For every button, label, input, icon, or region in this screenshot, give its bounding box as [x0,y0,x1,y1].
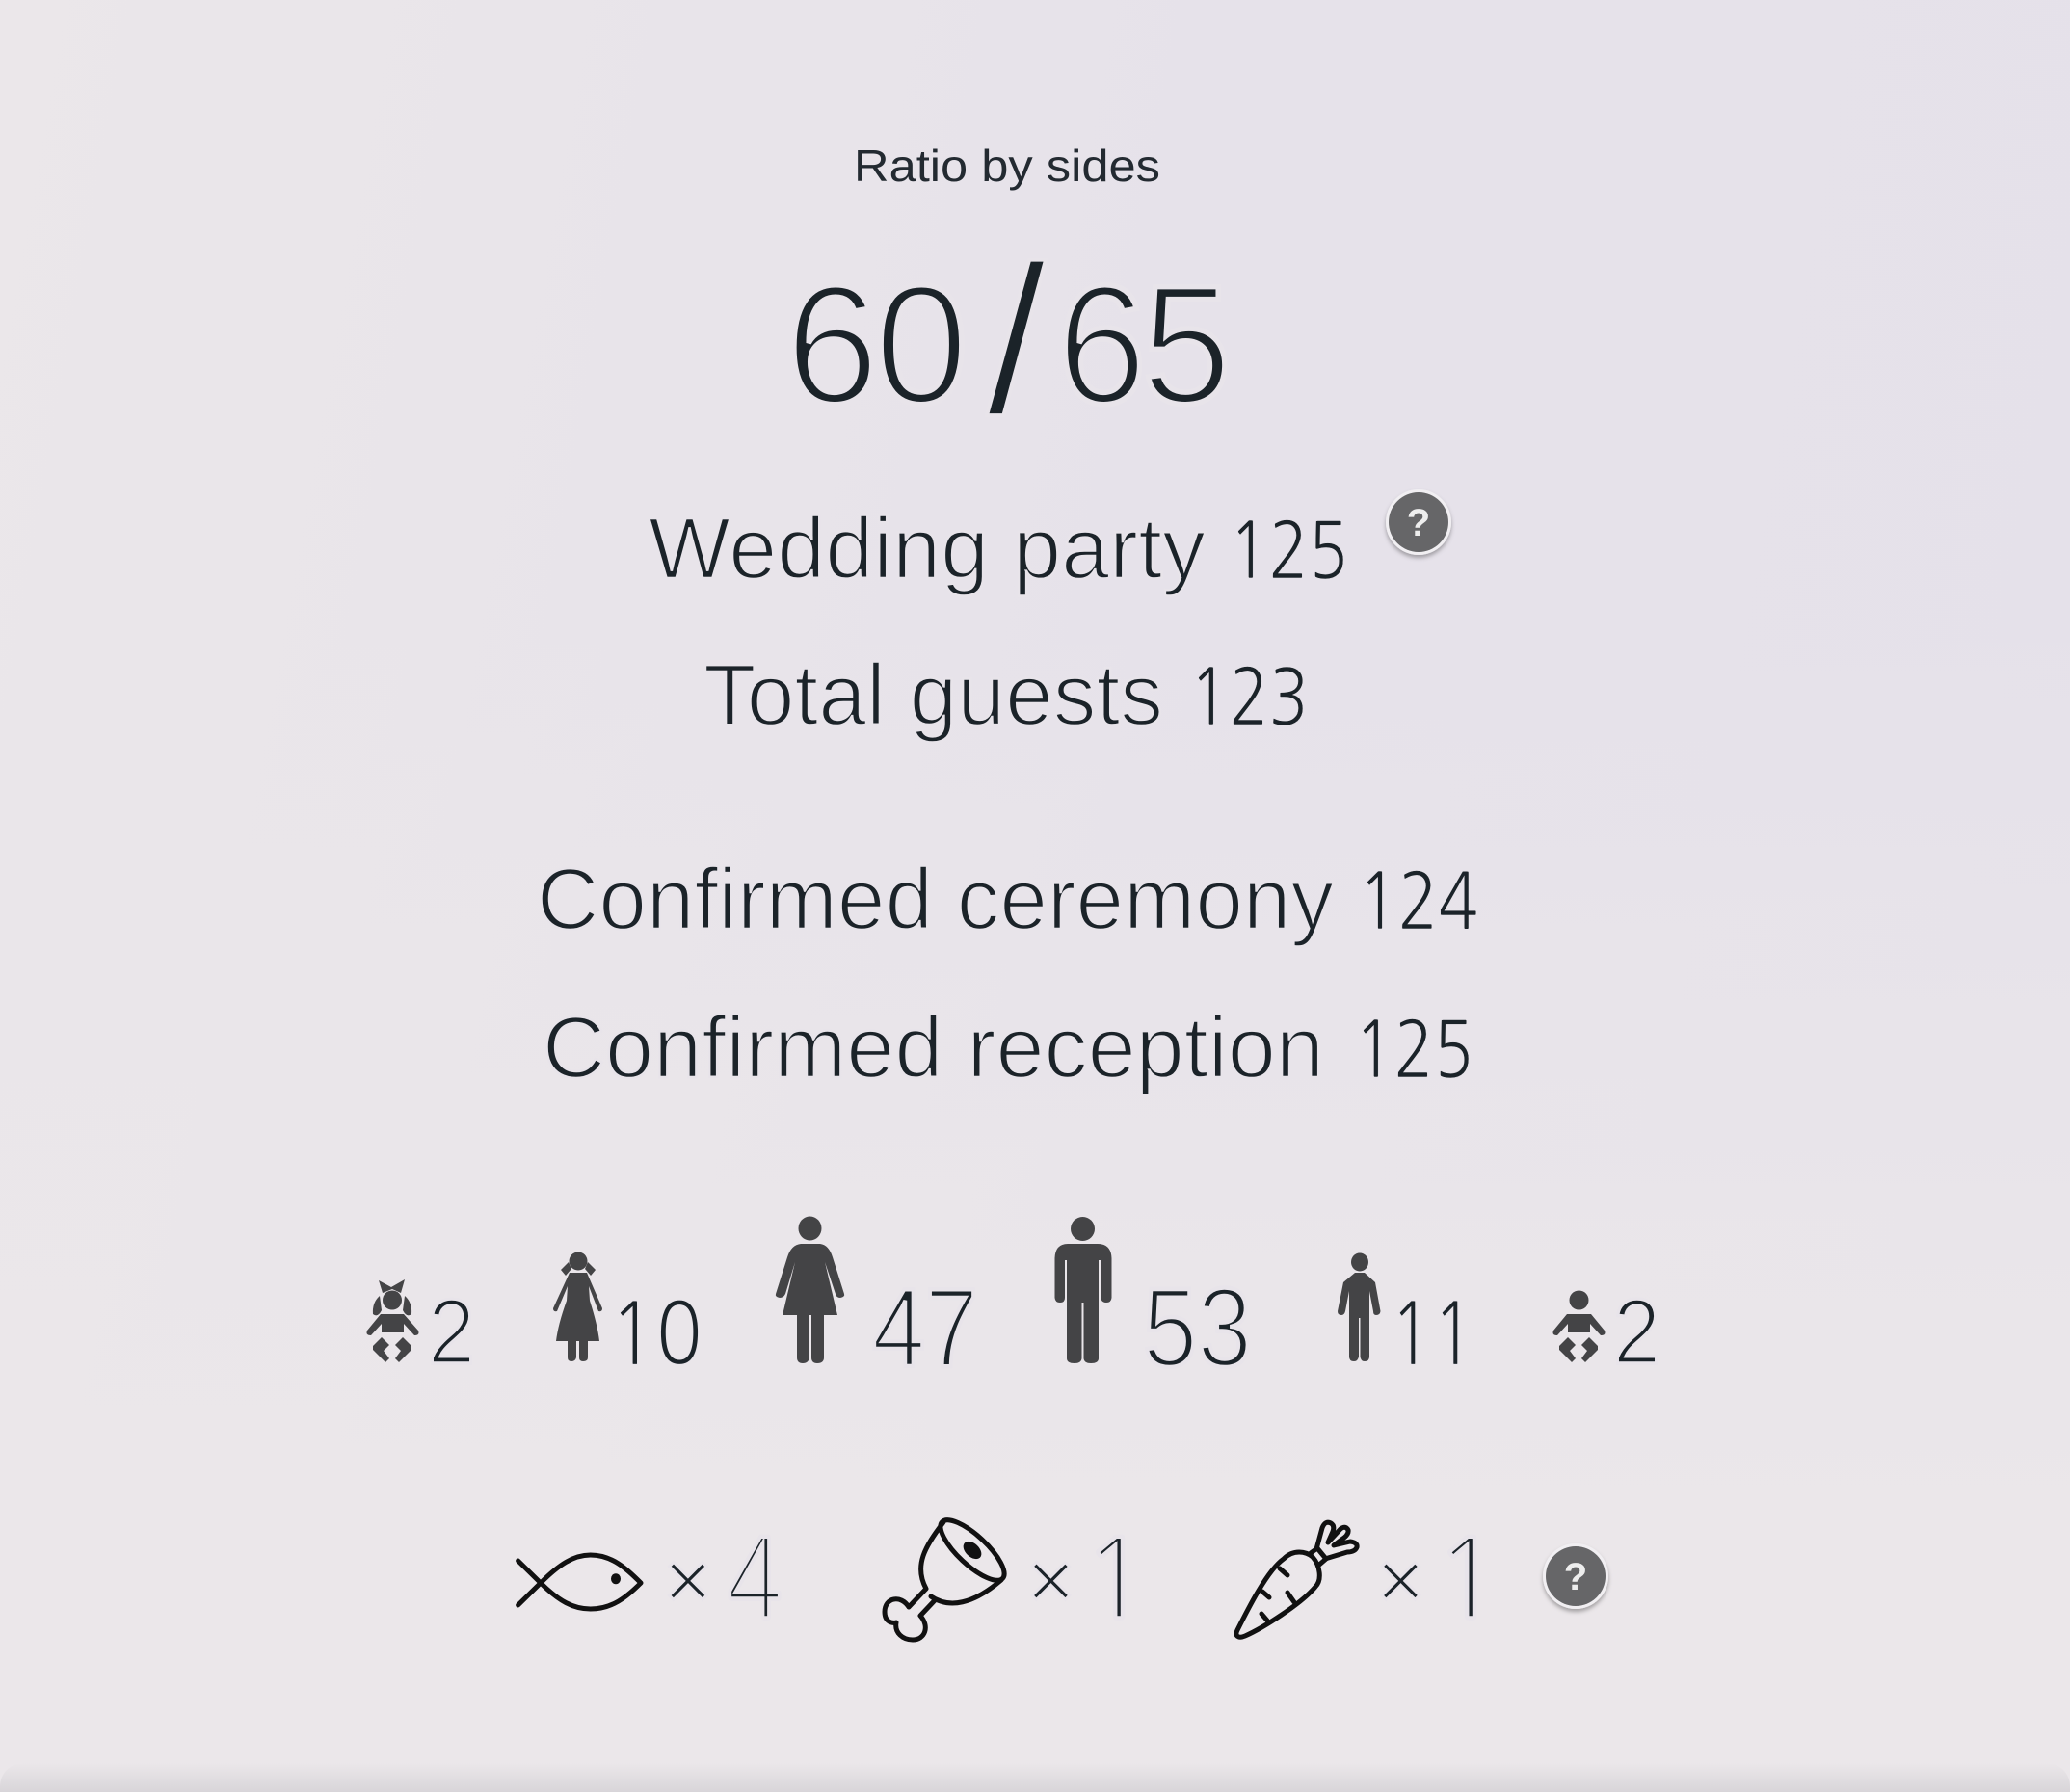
ratio number 60/65: 65 [1057,251,1227,439]
text: confirmed reception: 125 [1354,1012,1473,1089]
people counts row [366,1216,1660,1390]
icon: help badge meals [1543,1543,1608,1609]
icon: girl [553,1252,602,1361]
icon: man [1054,1217,1112,1363]
text: total guests: 123 [1189,659,1309,736]
heading: Ratio by sides: Ratio by sides [854,141,1160,191]
count: fish meals: × [663,1534,712,1627]
icon: fish [518,1555,641,1609]
icon: help badge meals: ? [1564,1556,1587,1598]
icon: woman [776,1216,844,1363]
text: wedding party: 125 [1229,513,1348,590]
text: confirmed reception: Confirmed reception [543,1000,1324,1096]
meal counts row [518,1512,1608,1640]
count: men: 53 [1143,1265,1252,1390]
count: women: 47 [872,1265,978,1390]
text: wedding party: Wedding party [649,501,1206,597]
icon: boy [1338,1252,1380,1361]
count: fish meals: 4 [727,1524,783,1634]
count: baby girls: 2 [428,1280,475,1384]
count: baby boys: 2 [1613,1280,1660,1384]
text: total guests: Total guests [703,647,1163,744]
count: meat meals: × [1026,1534,1075,1627]
icon: carrot [1236,1522,1357,1637]
ratio number 60/65: / [987,222,1047,459]
count: vegetarian meals: 1 [1434,1524,1500,1634]
count: boys: 11 [1390,1291,1474,1377]
icon: baby girl [366,1279,418,1362]
text: confirmed ceremony: Confirmed ceremony [537,852,1334,948]
icon: help badge wedding party: ? [1407,502,1430,544]
text: confirmed ceremony: 124 [1358,863,1478,940]
ratio number 60/65: 60 [785,251,964,439]
count: girls: 10 [609,1291,703,1377]
count: meat meals: 1 [1082,1524,1149,1634]
count: vegetarian meals: × [1376,1534,1425,1627]
icon: baby boy [1553,1291,1606,1362]
icon: meat [885,1512,1013,1640]
icon: help badge wedding party [1386,489,1451,555]
